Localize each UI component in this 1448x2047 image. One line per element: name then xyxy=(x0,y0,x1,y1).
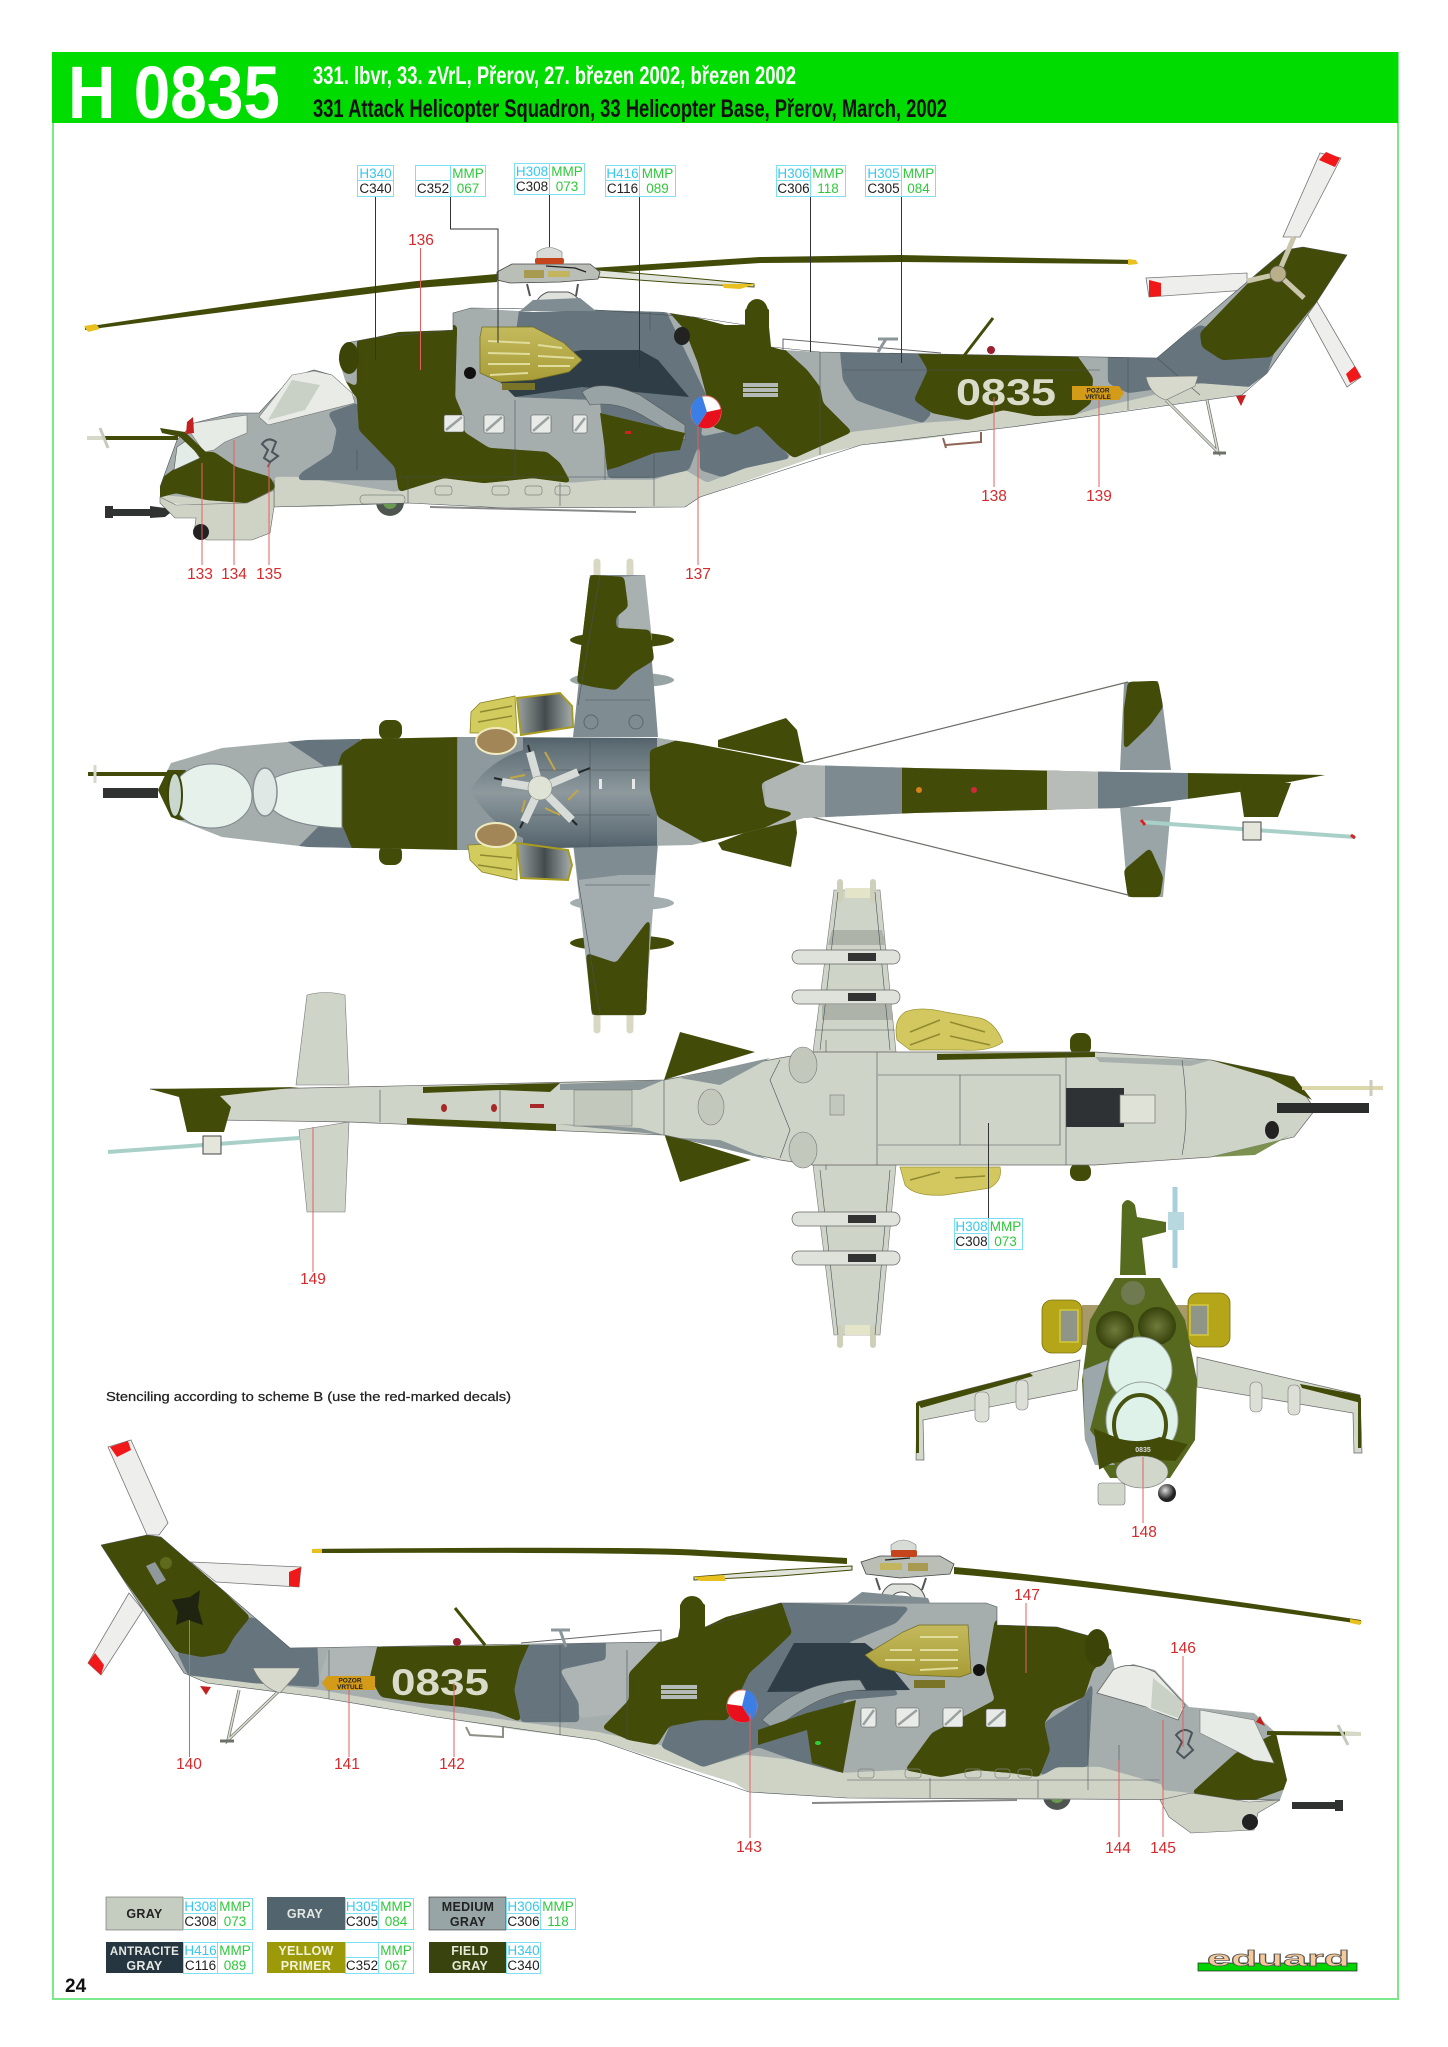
lower pozor vrtule plaque: POZOR xyxy=(338,1678,362,1684)
legend: gray H305 xyxy=(267,1897,414,1930)
lower tail skid xyxy=(220,1690,280,1741)
decal numbers: lower side view: 140 xyxy=(176,1756,202,1773)
belly hatches xyxy=(360,486,570,504)
lower nose and sensor xyxy=(1160,1793,1280,1833)
wing olive edges xyxy=(916,1373,1361,1453)
lower red light xyxy=(200,1686,211,1695)
exhaust stack xyxy=(746,299,768,325)
lower belly rod xyxy=(812,1800,1017,1803)
exhaust stack lower xyxy=(680,1596,704,1620)
tail rotor xyxy=(1146,152,1361,387)
legend: gray H305: H305 xyxy=(346,1899,378,1914)
tail rotor lower xyxy=(88,1440,301,1675)
stub mounts xyxy=(1070,1033,1091,1181)
lower cabin windows xyxy=(861,1708,1006,1727)
front view helicopter xyxy=(916,1187,1362,1505)
decal numbers: lower side view: 144 xyxy=(1105,1840,1131,1857)
upper wing xyxy=(570,562,674,737)
side view: right profile helicopter xyxy=(88,1440,1362,1833)
tail rotor underside xyxy=(108,1136,299,1154)
cowling lower xyxy=(1085,1629,1109,1667)
decal numbers: upper side view: 139 xyxy=(1086,488,1112,505)
spine lights xyxy=(599,779,635,789)
tail rotor plan xyxy=(1141,820,1355,840)
legend: gray H308: MMP xyxy=(219,1899,251,1914)
pozor vrtule plaque xyxy=(1072,386,1124,401)
lower spine wire and antennas xyxy=(453,1608,661,1647)
side view: left profile helicopter xyxy=(84,152,1361,540)
front canopy frame xyxy=(1114,1395,1166,1455)
legend: medium gray H306: MEDIUM xyxy=(442,1900,494,1914)
cannon xyxy=(105,506,170,518)
legend: yellow primer C352: MMP xyxy=(380,1943,412,1958)
legend: gray H308: H308 xyxy=(184,1899,217,1914)
main rotor xyxy=(84,248,1138,332)
legend: antracite gray H416 xyxy=(106,1942,252,1974)
lower exhaust duct xyxy=(762,1680,866,1730)
legend: gray H305: MMP xyxy=(380,1899,412,1914)
callout H416: 089 xyxy=(646,181,669,196)
griffon lion emblem xyxy=(262,439,278,467)
front pods xyxy=(1042,1293,1230,1353)
underside stabilizers xyxy=(296,992,349,1212)
decal numbers: upper side view: 137 xyxy=(685,566,711,583)
tail skid fairing xyxy=(1146,376,1198,400)
callout C352 xyxy=(416,166,486,196)
stencil note: Stenciling according to scheme B (use the red-marked decals) xyxy=(106,1389,511,1404)
lion emblem lower xyxy=(1176,1730,1193,1758)
sensor ball xyxy=(1158,1484,1176,1502)
lower roundel xyxy=(727,1690,757,1722)
rotor head xyxy=(497,264,600,283)
legend: antracite gray H416: MMP xyxy=(219,1943,251,1958)
czech subtitle: 331. lbvr, 33. zVrL, Přerov, 27. březen 2002, březen 2002 xyxy=(313,62,796,90)
legend: medium gray H306: GRAY xyxy=(450,1915,486,1929)
hull outline xyxy=(160,247,1347,508)
legend: medium gray H306: 118 xyxy=(547,1914,569,1929)
underside callout H308: H308 xyxy=(955,1219,988,1234)
decal 148 xyxy=(1131,1457,1157,1541)
rear canopy xyxy=(259,371,355,425)
lower wing xyxy=(570,843,674,1030)
underside view helicopter xyxy=(108,882,1383,1345)
legend: gray H308: GRAY xyxy=(126,1907,163,1921)
callout H305: MMP xyxy=(903,166,934,181)
legend: yellow primer C352 xyxy=(267,1942,414,1974)
callout H340 xyxy=(358,166,394,196)
callout H308: 073 xyxy=(556,179,578,194)
legend: field gray H340: H340 xyxy=(507,1943,540,1958)
decal numbers: upper side view: 136 xyxy=(408,232,434,249)
callout H416 xyxy=(606,166,676,196)
boarding step xyxy=(943,432,981,448)
decal numbers: upper side view: 135 xyxy=(256,566,282,583)
front gray flank xyxy=(1083,1360,1115,1465)
callout H308: C308 xyxy=(516,179,548,194)
decal numbers: upper side view: 134 xyxy=(221,566,247,583)
front pod grilles xyxy=(1060,1305,1208,1342)
lower boarding step xyxy=(466,1727,503,1737)
bracing wires xyxy=(804,682,1128,895)
lower hull outline xyxy=(101,1535,1280,1800)
body camouflage xyxy=(158,737,1325,850)
nose underside and sensor xyxy=(160,490,274,540)
front gun box xyxy=(1098,1483,1125,1505)
plan cannon xyxy=(103,788,158,798)
lower probe xyxy=(1267,1725,1361,1745)
front canopies xyxy=(1106,1337,1178,1458)
front code: 0835 xyxy=(1135,1447,1151,1454)
callout H305 xyxy=(866,166,936,196)
legend: medium gray H306: MMP xyxy=(542,1899,574,1914)
engine spheres xyxy=(1096,1307,1176,1349)
red dots on boom xyxy=(916,787,977,793)
yellow pods, top view xyxy=(468,693,573,880)
legend: yellow primer C352: C352 xyxy=(346,1958,378,1973)
red tail light xyxy=(1236,395,1246,406)
top view canopies xyxy=(168,764,342,828)
paint legend xyxy=(106,1897,576,1974)
front wings xyxy=(916,1357,1362,1460)
underside callout H308: MMP xyxy=(990,1219,1021,1234)
lower yellow pod xyxy=(865,1625,971,1688)
legend: gray H308: C308 xyxy=(184,1914,217,1929)
rotor fairing xyxy=(847,1592,930,1603)
legend: antracite gray H416: ANTRACITE xyxy=(110,1946,179,1958)
yellow engine pod xyxy=(480,327,582,390)
decal numbers: upper side view xyxy=(187,232,1112,583)
tail code 0835: 0835 xyxy=(956,372,1056,413)
decal 149: 149 xyxy=(300,1271,326,1288)
legend: gray H305: GRAY xyxy=(287,1907,323,1921)
tail rotor hub xyxy=(1247,237,1304,298)
legend: medium gray H306 xyxy=(429,1897,576,1930)
windshield xyxy=(174,440,200,470)
eduard logo xyxy=(1198,1946,1357,1971)
callout H416: H416 xyxy=(606,166,639,181)
pozor vrtule plaque: VRTULE xyxy=(1085,394,1112,401)
legend: medium gray H306: C306 xyxy=(507,1914,540,1929)
olive stub fins xyxy=(718,718,804,867)
pozor vrtule plaque: POZOR xyxy=(1086,388,1110,394)
front tail boom xyxy=(1120,1187,1184,1275)
legend: yellow primer C352: 067 xyxy=(385,1958,407,1973)
window glare xyxy=(446,417,585,431)
eduard logo: eduard xyxy=(1207,1946,1350,1971)
stub wing red mark xyxy=(625,431,631,434)
belly rod xyxy=(430,507,636,512)
legend: antracite gray H416: H416 xyxy=(184,1943,217,1958)
lower rotor head xyxy=(861,1556,954,1578)
legend: gray H305: C305 xyxy=(346,1914,378,1929)
front canopy xyxy=(190,415,247,452)
underside callout H308 xyxy=(954,1123,1022,1250)
legend: field gray H340: FIELD xyxy=(451,1944,489,1958)
callout H306 xyxy=(776,166,846,196)
callout H305: 084 xyxy=(907,181,930,196)
callout H416: MMP xyxy=(642,166,673,181)
olive nose sensor xyxy=(1265,1121,1279,1139)
lower mast xyxy=(876,1578,926,1602)
lower cannon xyxy=(1292,1800,1343,1811)
decal numbers: upper side view: 138 xyxy=(981,488,1007,505)
main wheel xyxy=(376,488,404,516)
underside cannon xyxy=(1277,1103,1369,1113)
wing pylons xyxy=(792,950,900,1265)
underside callout H308: C308 xyxy=(955,1234,988,1249)
national roundel xyxy=(691,396,721,428)
tail fin plan xyxy=(1239,783,1291,817)
lower window glare xyxy=(863,1710,1004,1725)
decal numbers: lower side view: 146 xyxy=(1170,1640,1196,1657)
lower tail rotor pivot xyxy=(160,1557,172,1569)
lower black sight xyxy=(973,1664,985,1676)
legend: field gray H340: C340 xyxy=(507,1958,540,1973)
fuselage camouflage xyxy=(160,247,1347,508)
legend: antracite gray H416: 089 xyxy=(224,1958,246,1973)
front chin xyxy=(1116,1456,1168,1488)
cockpit well xyxy=(1066,1088,1155,1127)
callout H340: C340 xyxy=(359,181,392,196)
callout H305: C305 xyxy=(867,181,900,196)
red markers xyxy=(441,1104,544,1112)
legend: gray H308 xyxy=(106,1897,252,1930)
header banner xyxy=(52,51,1398,134)
tail fin olive xyxy=(150,1087,299,1132)
lower gray cockpit panel xyxy=(1097,1707,1231,1793)
callout H308: MMP xyxy=(551,164,583,179)
legend: yellow primer C352: PRIMER xyxy=(281,1959,331,1973)
nose red spike xyxy=(186,417,194,434)
boom stabilizers xyxy=(1120,681,1171,897)
lower pozor vrtule plaque xyxy=(322,1676,375,1691)
callout H305: H305 xyxy=(867,166,900,181)
lower pozor vrtule plaque: VRTULE xyxy=(337,1684,364,1691)
lower skid fairing xyxy=(253,1668,300,1693)
legend: field gray H340: GRAY xyxy=(452,1959,488,1973)
callout H308: H308 xyxy=(516,164,548,179)
lower green light xyxy=(815,1741,821,1745)
underside wings xyxy=(813,882,896,1345)
lower air grate xyxy=(661,1685,697,1699)
title code: H 0835 xyxy=(68,51,280,134)
callout C352: C352 xyxy=(417,181,449,196)
underside camouflage edges xyxy=(407,1052,1312,1160)
pylon dark gear xyxy=(848,953,876,1262)
mast xyxy=(527,284,582,310)
tail skid xyxy=(1166,400,1226,453)
main rotor lower xyxy=(312,1540,1362,1625)
exhaust duct xyxy=(582,386,685,440)
black sight xyxy=(464,367,476,379)
callout H306: 118 xyxy=(817,181,839,196)
stub wing olive root xyxy=(600,413,685,470)
exhaust port xyxy=(674,327,690,345)
front pylons xyxy=(975,1380,1300,1422)
callout H306: H306 xyxy=(777,166,810,181)
front body xyxy=(1082,1278,1197,1478)
legend: gray H308: 073 xyxy=(224,1914,246,1929)
legend: yellow primer C352: YELLOW xyxy=(278,1944,334,1958)
paint callouts: top row xyxy=(358,164,936,367)
underside body xyxy=(150,1052,1315,1165)
callout H340: H340 xyxy=(359,166,392,181)
griffon emblem xyxy=(172,1590,203,1625)
legend: medium gray H306: H306 xyxy=(507,1899,540,1914)
decal numbers: lower side view: 143 xyxy=(736,1839,762,1856)
legend: gray H305: 084 xyxy=(385,1914,408,1929)
decal 148: 148 xyxy=(1131,1524,1157,1541)
leader lines xyxy=(376,195,902,367)
lower front canopy xyxy=(1200,1710,1274,1763)
plan probe xyxy=(88,765,167,783)
nose strut xyxy=(160,428,207,456)
decal numbers: lower side view xyxy=(176,1587,1196,1857)
decal numbers: lower side view: 141 xyxy=(334,1756,360,1773)
decal numbers: lower side view: 142 xyxy=(439,1756,465,1773)
lower tail code 0835: 0835 xyxy=(391,1662,489,1703)
callout H306: C306 xyxy=(777,181,810,196)
rotor pylon fairing xyxy=(520,298,596,311)
top view helicopter xyxy=(88,562,1355,1030)
fin gray plate xyxy=(146,1562,166,1585)
callout H416: C116 xyxy=(607,181,638,196)
decal numbers: upper side view: 133 xyxy=(187,566,213,583)
lower belly hatches xyxy=(858,1769,1032,1778)
lower rear canopy xyxy=(1097,1665,1185,1720)
decal numbers: lower side view: 147 xyxy=(1014,1587,1040,1604)
front nose olive xyxy=(1095,1430,1186,1468)
english subtitle: 331 Attack Helicopter Squadron, 33 Helicopter Base, Přerov, March, 2002 xyxy=(313,95,947,123)
upper cowl vent xyxy=(1121,1281,1145,1305)
underside olive fins xyxy=(664,1032,755,1182)
pitot probe xyxy=(87,428,178,448)
page number: 24 xyxy=(65,1976,87,1997)
legend: field gray H340 xyxy=(429,1942,540,1974)
cowling intake xyxy=(339,342,359,374)
lower stub olive xyxy=(758,1700,856,1773)
spine wire and antennas xyxy=(783,318,995,357)
decal numbers: lower side view: 145 xyxy=(1150,1840,1176,1857)
callout H308 xyxy=(514,164,584,194)
underside detail circles xyxy=(574,1047,844,1168)
underside pods xyxy=(896,1009,1003,1195)
callout C352: 067 xyxy=(457,181,479,196)
underside probe xyxy=(1302,1080,1383,1096)
lower fuselage camouflage xyxy=(90,1530,1300,1815)
rotor head star xyxy=(494,745,590,828)
pod ribs xyxy=(910,1020,990,1180)
callout H306: MMP xyxy=(812,166,844,181)
lower red spike xyxy=(1256,1716,1265,1726)
callout C352: MMP xyxy=(452,166,484,181)
panels xyxy=(380,1052,1186,1165)
legend: antracite gray H416: C116 xyxy=(185,1958,216,1973)
lower wheel xyxy=(1043,1782,1071,1810)
air grate xyxy=(743,383,778,397)
front pods struts xyxy=(1082,1305,1188,1345)
side mounts xyxy=(379,720,402,865)
cabin windows xyxy=(444,415,587,433)
underside callout H308: 073 xyxy=(994,1234,1017,1249)
legend: antracite gray H416: GRAY xyxy=(126,1959,163,1973)
